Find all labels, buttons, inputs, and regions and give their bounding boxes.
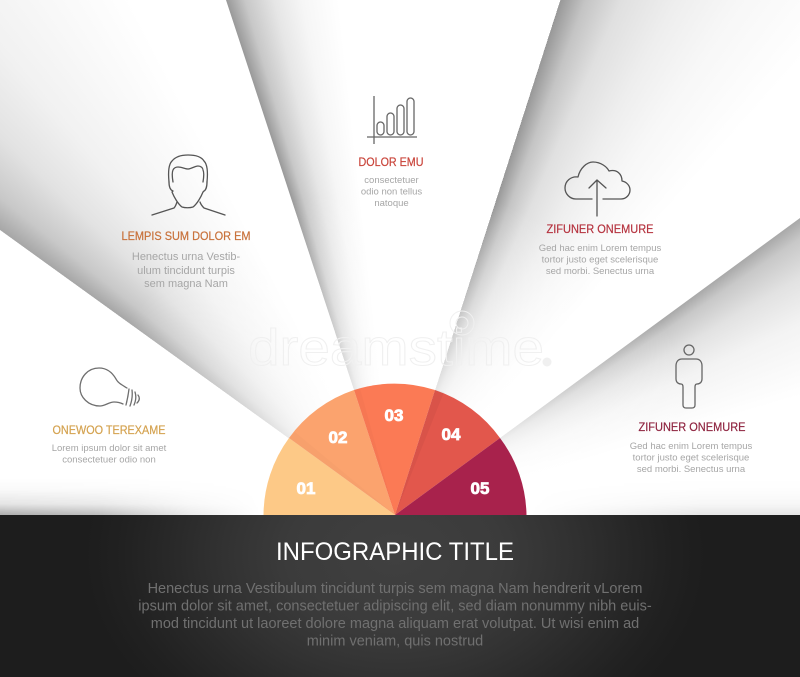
panel: dark title band <box>0 515 800 677</box>
panel 1 wedge <box>0 0 800 515</box>
shadow softening near the centre <box>0 0 800 515</box>
semicircle chart <box>264 384 526 515</box>
text: zifuner top body: sed morbi. Senectus urna <box>546 266 655 277</box>
text: zifuner bottom body: sed morbi. Senectus urna <box>637 464 746 475</box>
heading: zifuner top: ZIFUNER ONEMURE <box>546 224 654 236</box>
text: zifuner top body: tortor justo eget scelerisque <box>542 254 658 266</box>
segment numbers <box>297 406 489 498</box>
text: dolor body: odio non tellus <box>361 186 422 198</box>
segment 05 <box>395 438 526 515</box>
text: zifuner bottom body: tortor justo eget scelerisque <box>633 452 749 464</box>
heading: zifuner bottom: ZIFUNER ONEMURE <box>638 422 746 434</box>
heading: onewoo: ONEWOO TEREXAME <box>52 425 166 437</box>
panel 4 wedge <box>435 0 740 394</box>
heading: dolor emu: DOLOR EMU <box>358 157 424 169</box>
text: description: mod tincidunt ut laoreet dolore magna aliquam erat volutpat. Ut wisi enim ad <box>151 616 639 632</box>
panel 2 wedge <box>0 0 299 438</box>
text: dolor body: consectetuer <box>364 175 419 186</box>
text: dolor body <box>361 175 422 209</box>
title: INFOGRAPHIC TITLE <box>276 538 514 566</box>
icon: bar chart <box>367 96 417 144</box>
text: description: ipsum dolor sit amet, consectetuer adipiscing elit, sed diam nonummy nibh euis- <box>138 598 652 614</box>
icon: standing person <box>676 345 702 408</box>
segment numbers: 01 <box>297 479 315 498</box>
text: zifuner bottom body: Ged hac enim Lorem tempus <box>630 441 752 452</box>
text: description: minim veniam, quis nostrud <box>307 634 483 650</box>
segment numbers: 03 <box>385 406 403 425</box>
panel 3 wedge <box>226 0 364 390</box>
text: description <box>138 581 652 650</box>
segment edge shading <box>289 388 444 515</box>
text: onewoo body: Lorem ipsum dolor sit amet <box>52 443 167 454</box>
text: lempis body: ulum tincidunt turpis <box>137 265 235 277</box>
text: lempis body: Henectus urna Vestib- <box>132 251 240 263</box>
panel 5 wedge <box>500 218 800 448</box>
icon: light bulb <box>80 368 139 406</box>
heading: lempis: LEMPIS SUM DOLOR EM <box>122 231 250 243</box>
segment numbers: 02 <box>329 428 347 447</box>
segment 02 <box>289 390 395 515</box>
segment numbers: 05 <box>471 479 489 498</box>
segment 01 <box>264 438 395 515</box>
bottom shadow above the dark band <box>0 492 800 515</box>
text: onewoo body <box>52 443 167 466</box>
text: onewoo body: consectetuer odio non <box>62 454 156 466</box>
text: description: Henectus urna Vestibulum tincidunt turpis sem magna Nam hendrerit vLorem <box>148 581 642 597</box>
panel: fan background <box>0 0 800 515</box>
text: dolor body: natoque <box>374 198 409 209</box>
segment 03 <box>354 384 435 515</box>
segment numbers: 04 <box>442 425 461 444</box>
icon: cloud upload <box>565 162 630 216</box>
icon: head and shoulders <box>152 155 225 215</box>
text: zifuner top body: Ged hac enim Lorem tempus <box>539 243 661 254</box>
text: lempis body: sem magna Nam <box>144 278 228 290</box>
text: zifuner bottom body <box>630 441 752 475</box>
segment 04 <box>395 390 500 515</box>
text: zifuner top body <box>539 243 661 277</box>
text: lempis body <box>132 251 240 290</box>
watermark: dreamstime <box>248 319 544 376</box>
